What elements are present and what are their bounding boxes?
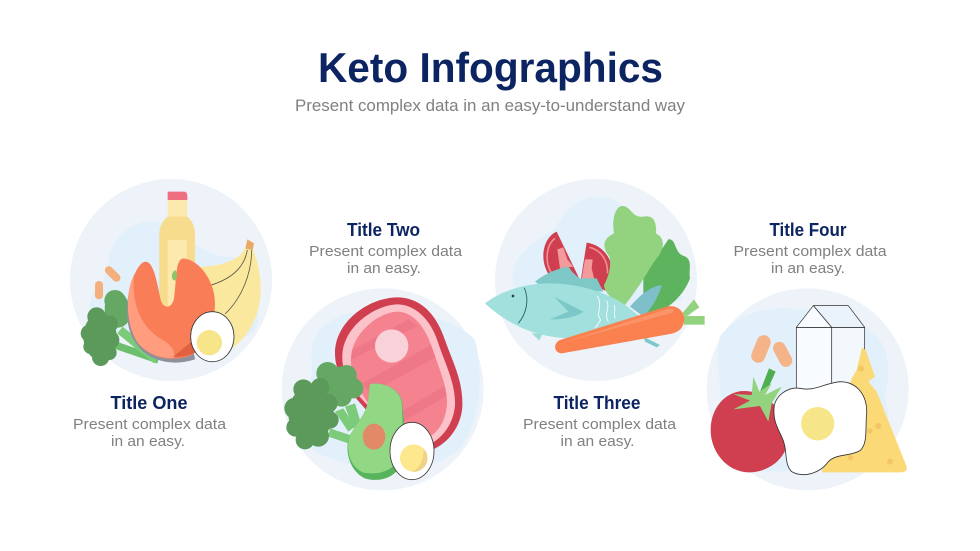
label: title three: [523, 393, 677, 450]
label: title three: in an easy.: [560, 433, 634, 450]
label: title three: Title Three: [554, 393, 640, 413]
peanuts: [95, 265, 122, 299]
steak: [335, 297, 462, 450]
subtitle: Present complex data in an easy-to-understand way: [295, 96, 685, 115]
salmon steak: [127, 258, 215, 363]
label: title two: [309, 220, 463, 277]
illustration: fish, tomato, lettuce, carrot: [485, 179, 705, 381]
label: title one: Title One: [110, 393, 188, 413]
illustration: milk, tomato, fried egg, cheese: [707, 288, 909, 490]
title: Keto Infographics: [318, 44, 663, 91]
label: title one: Present complex data: [73, 416, 227, 433]
label: title four: Present complex data: [734, 243, 887, 260]
banana: [200, 239, 261, 348]
carrot: [555, 299, 705, 353]
tomato: [711, 368, 788, 472]
broccoli: [81, 290, 158, 366]
egg: [390, 422, 434, 480]
illustration: oil, salmon, banana, egg, broccoli: [70, 179, 272, 381]
oil bottle: [159, 192, 195, 310]
label: title two: Title Two: [347, 220, 420, 240]
label: title four: [734, 220, 887, 277]
label: title three: Present complex data: [523, 416, 677, 433]
milk carton: [796, 306, 865, 413]
lettuce: [604, 206, 690, 313]
illustration: steak, broccoli, avocado, egg: [282, 288, 484, 490]
avocado: [347, 384, 405, 480]
label: title one: [73, 393, 227, 450]
peanuts: [749, 333, 795, 369]
broccoli: [284, 362, 363, 449]
label: title two: Present complex data: [309, 243, 463, 260]
egg: [191, 312, 234, 362]
label: title one: in an easy.: [111, 433, 185, 450]
label: title four: Title Four: [770, 220, 846, 240]
fried egg: [774, 382, 867, 475]
label: title four: in an easy.: [771, 260, 845, 277]
cheese: [822, 347, 907, 472]
label: title two: in an easy.: [347, 260, 421, 277]
fish: [485, 267, 662, 347]
tomato slices: [543, 232, 612, 291]
